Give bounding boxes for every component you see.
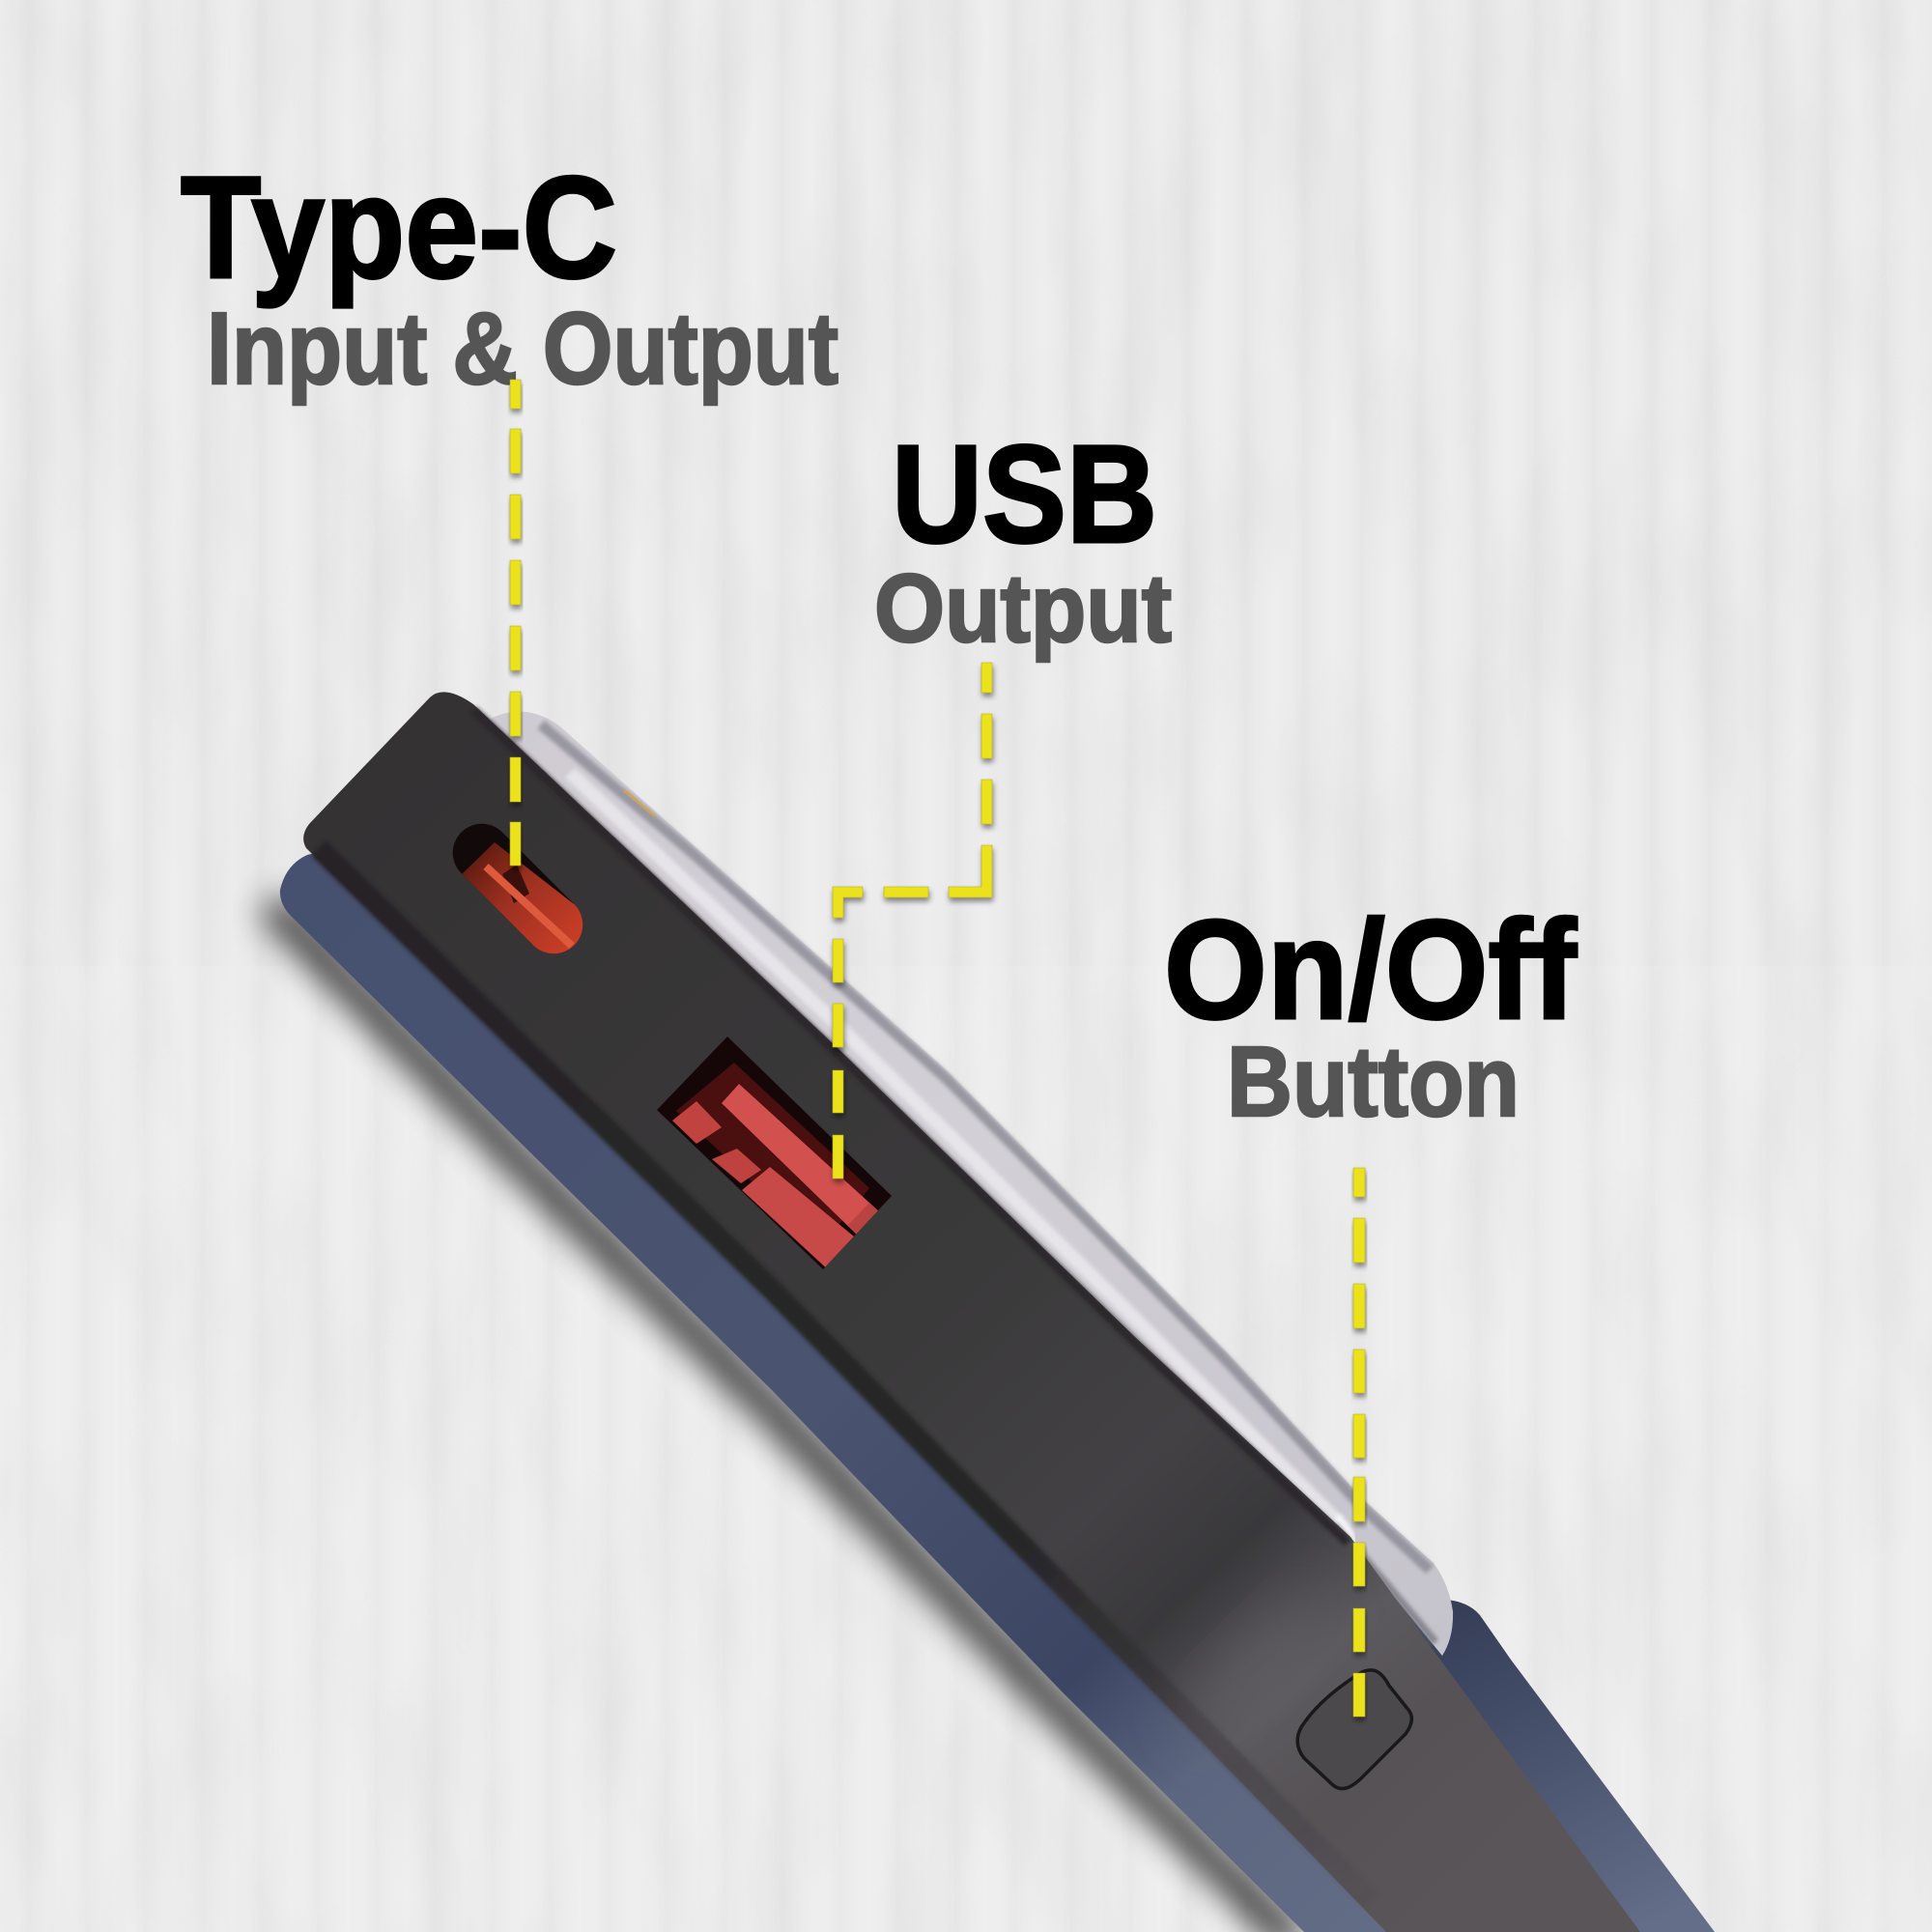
USB port opening (657, 1037, 892, 1273)
dark upper bevel of the port face (473, 710, 1348, 1543)
label: USB Output: USB (892, 416, 1157, 572)
label: USB Output (874, 416, 1172, 663)
label: Type-C Input & Output: Type-C (181, 146, 617, 308)
shadow under the power bank (271, 904, 1295, 1932)
label: On/Off Button: Button (1227, 1026, 1520, 1137)
USB port tongue (722, 1084, 881, 1236)
right navy side of the case (1391, 1584, 1715, 1932)
label: USB Output: Output (874, 554, 1172, 663)
black port face of the power bank (303, 692, 1640, 1932)
dashed leader: USB (833, 663, 992, 1179)
power button (1297, 1670, 1411, 1789)
lower navy side of the case (280, 850, 1430, 1932)
dark lower bevel of the port face (319, 848, 1372, 1901)
USB port red pads (676, 1063, 869, 1225)
Type-C port red interior (462, 842, 583, 954)
label: Type-C Input & Output: Input & Output (207, 292, 838, 406)
power bank product photo (271, 692, 1715, 1932)
label: Type-C Input & Output (181, 146, 838, 406)
Type-C port opening (452, 823, 583, 954)
transparent top panel (473, 710, 1453, 1656)
dashed leader: On/Off (1353, 1168, 1365, 1717)
label: On/Off Button: On/Off (1164, 891, 1577, 1048)
label: On/Off Button (1164, 891, 1577, 1137)
dashed leader: Type-C (510, 380, 521, 866)
highlight patch near the button (1169, 1579, 1343, 1753)
